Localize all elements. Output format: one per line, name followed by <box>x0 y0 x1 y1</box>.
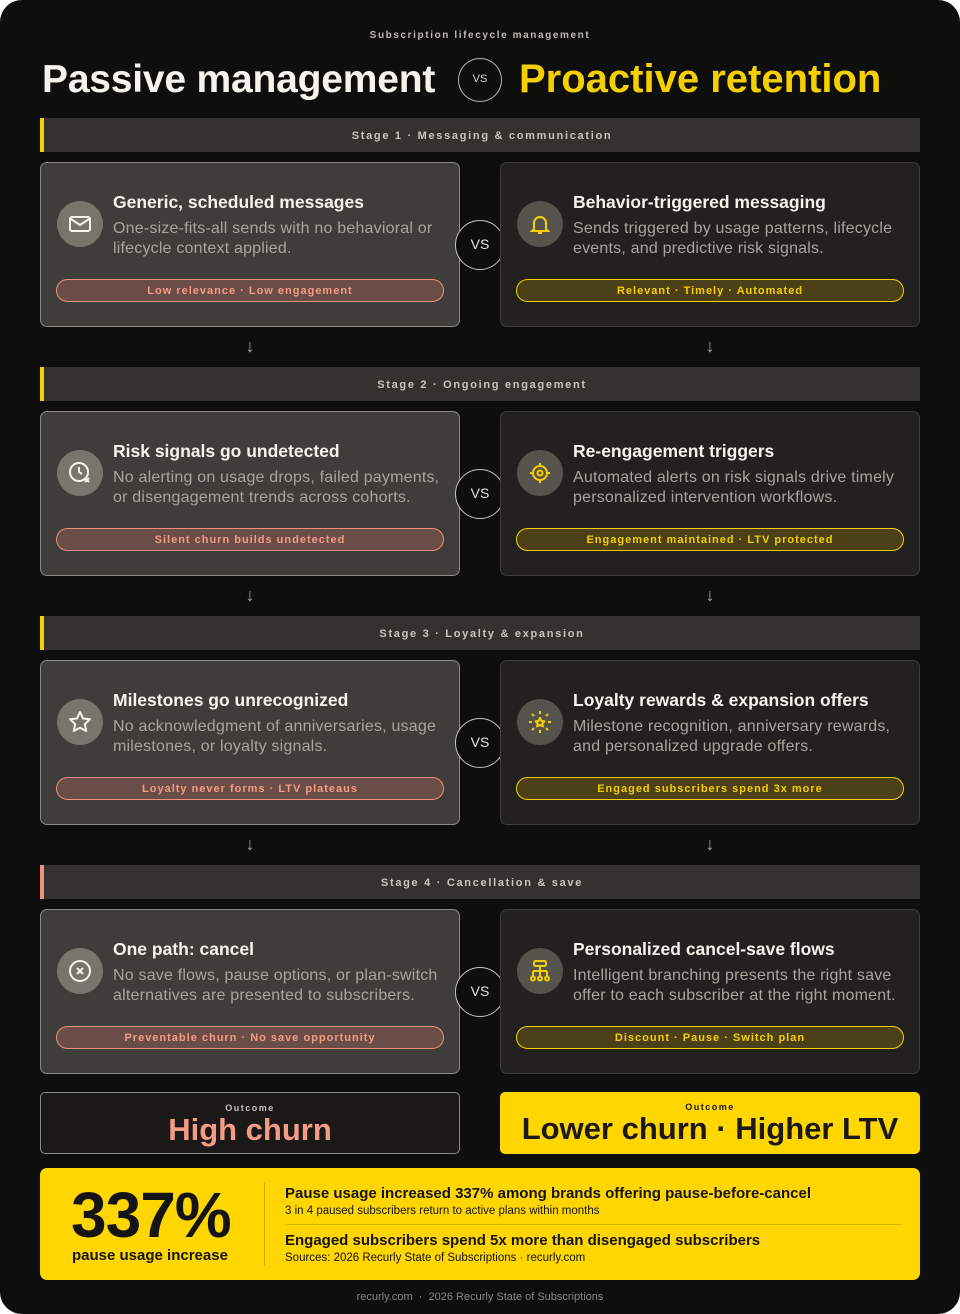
panel: stage 1 proactive <box>500 162 920 327</box>
stage 2 header <box>40 367 920 401</box>
stage 4 header <box>40 865 920 899</box>
icon: x circle <box>57 948 103 994</box>
subtitle: Subscription lifecycle management <box>370 30 590 41</box>
description: Milestone recognition, anniversary rewards, and personalized upgrade offers. <box>573 718 890 755</box>
stage 3 header: Stage 3 · Loyalty & expansion <box>379 628 585 640</box>
description: Sends triggered by usage patterns, lifecycle events, and predictive risk signals. <box>573 220 892 257</box>
tag <box>516 1026 904 1049</box>
icon: branching <box>517 948 563 994</box>
footer: recurly.com · 2026 Recurly State of Subscriptions <box>357 1291 603 1303</box>
arrow left 2: ↓ <box>246 585 254 605</box>
tag <box>56 279 444 302</box>
arrow left 3: ↓ <box>246 834 254 854</box>
fact 1 <box>285 1185 811 1217</box>
description: No save flows, pause options, or plan-switch alternatives are presented to subscribers. <box>113 967 438 1004</box>
vs badge 3: VS <box>471 734 489 750</box>
fact 2: Engaged subscribers spend 5x more than disengaged subscribers <box>285 1232 760 1249</box>
stage 4 header: Stage 4 · Cancellation & save <box>381 877 583 889</box>
vs badge 2 <box>455 469 505 519</box>
tag <box>56 1026 444 1049</box>
tag <box>516 279 904 302</box>
panel: stage 3 proactive <box>500 660 920 825</box>
tag: Engaged subscribers spend 3x more <box>597 783 823 795</box>
heading: Behavior-triggered messaging <box>573 192 826 212</box>
stage 1 header <box>40 118 920 152</box>
heading: Generic, scheduled messages <box>113 192 364 212</box>
heading: Re-engagement triggers <box>573 441 774 461</box>
tag <box>516 777 904 800</box>
arrow left 1: ↓ <box>246 336 254 356</box>
icon: target <box>517 450 563 496</box>
outcome: passive: High churn <box>168 1112 332 1147</box>
panel: stage 1 passive <box>40 162 460 327</box>
tag: Discount · Pause · Switch plan <box>615 1032 805 1044</box>
description: Intelligent branching presents the right save offer to each subscriber at the right moment. <box>573 967 896 1004</box>
big stat: 337% <box>71 1179 231 1251</box>
description: One-size-fits-all sends with no behavioral or lifecycle context applied. <box>113 220 432 257</box>
outcome: passive: Outcome <box>225 1103 275 1113</box>
description: No alerting on usage drops, failed payments, or disengagement trends across cohorts. <box>113 469 439 506</box>
panel: stage 2 proactive <box>500 411 920 576</box>
title vs badge: VS <box>473 73 487 85</box>
heading: One path: cancel <box>113 939 254 959</box>
outcome: proactive <box>500 1092 920 1154</box>
arrow right 3: ↓ <box>706 834 714 854</box>
tag <box>516 528 904 551</box>
fact 2: Sources: 2026 Recurly State of Subscriptions · recurly.com <box>285 1252 585 1264</box>
panel: stage 2 passive <box>40 411 460 576</box>
fact 2 <box>285 1232 760 1264</box>
vs badge 4 <box>455 967 505 1017</box>
panel: stage 4 proactive <box>500 909 920 1074</box>
stat label: pause usage increase <box>72 1247 228 1264</box>
stage 2 header: Stage 2 · Ongoing engagement <box>377 379 587 391</box>
description: Automated alerts on risk signals drive timely personalized intervention workflows. <box>573 469 894 506</box>
outcome: proactive: Lower churn · Higher LTV <box>522 1111 898 1146</box>
title: passive: Passive management <box>42 58 435 101</box>
fact 1: 3 in 4 paused subscribers return to active plans within months <box>285 1205 600 1217</box>
outcome: proactive: Outcome <box>685 1102 735 1112</box>
stage 1 header: Stage 1 · Messaging & communication <box>352 130 612 142</box>
tag: Low relevance · Low engagement <box>147 285 353 297</box>
icon: star <box>57 699 103 745</box>
panel: stage 4 passive <box>40 909 460 1074</box>
icon: envelope <box>57 201 103 247</box>
vs badge 1: VS <box>471 236 489 252</box>
tag: Silent churn builds undetected <box>155 534 345 546</box>
vs badge 3 <box>455 718 505 768</box>
icon: bell <box>517 201 563 247</box>
heading: Risk signals go undetected <box>113 441 340 461</box>
arrow right 1: ↓ <box>706 336 714 356</box>
icon: clock <box>57 450 103 496</box>
tag: Relevant · Timely · Automated <box>617 285 803 297</box>
tag: Loyalty never forms · LTV plateaus <box>142 783 358 795</box>
icon: sparkle star <box>517 699 563 745</box>
vs badge 4: VS <box>471 983 489 999</box>
vs badge 2: VS <box>471 485 489 501</box>
panel: stage 3 passive <box>40 660 460 825</box>
arrow right 2: ↓ <box>706 585 714 605</box>
tag <box>56 777 444 800</box>
description: No acknowledgment of anniversaries, usage milestones, or loyalty signals. <box>113 718 436 755</box>
vs badge 1 <box>455 220 505 270</box>
heading: Loyalty rewards & expansion offers <box>573 690 869 710</box>
title: proactive: Proactive retention <box>519 57 881 101</box>
title vs badge <box>458 58 502 102</box>
tag <box>56 528 444 551</box>
heading: Personalized cancel-save flows <box>573 939 835 959</box>
fact 1: Pause usage increased 337% among brands offering pause-before-cancel <box>285 1185 811 1202</box>
stage 3 header <box>40 616 920 650</box>
tag: Engagement maintained · LTV protected <box>586 534 834 546</box>
stats callout <box>40 1168 920 1280</box>
tag: Preventable churn · No save opportunity <box>124 1032 376 1044</box>
heading: Milestones go unrecognized <box>113 690 348 710</box>
outcome: passive <box>40 1092 460 1154</box>
